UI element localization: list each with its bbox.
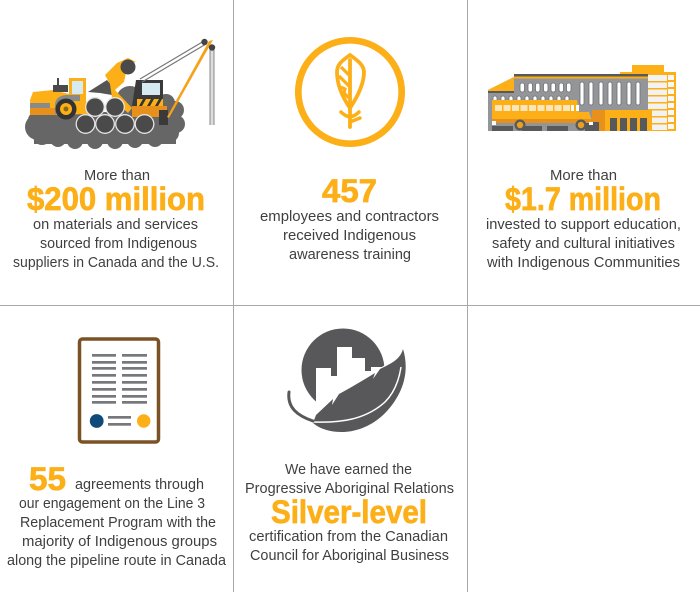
panel: community investment xyxy=(486,65,681,271)
text: agreements description: agreements through xyxy=(75,476,204,493)
icon: construction equipment and pipes xyxy=(25,39,215,149)
text: training description xyxy=(260,208,439,263)
icon: feather in circle xyxy=(298,40,402,144)
text: investment description: invested to support education, xyxy=(486,216,681,233)
panel: agreements xyxy=(7,339,227,569)
text: certification description: Council for Aboriginal Business xyxy=(250,547,449,564)
text: agreements description: our engagement on the Line 3 xyxy=(19,495,205,512)
text: more than: More than xyxy=(84,167,150,184)
text: training description: employees and contractors xyxy=(260,208,439,225)
text: certification description xyxy=(249,528,449,564)
text: suppliers description: on materials and services xyxy=(33,216,198,233)
icon: school building and bus xyxy=(488,65,676,131)
text: more than: More than xyxy=(550,167,617,184)
stat: 55: 55 xyxy=(29,461,66,497)
stat: $200 million: $200 million xyxy=(27,181,205,217)
text: earned xyxy=(245,461,454,497)
icon: feather and city in circle xyxy=(289,328,406,432)
text: training description: awareness training xyxy=(289,246,411,263)
text: agreements description xyxy=(7,476,227,569)
panel: awareness training xyxy=(260,40,439,263)
panel: certification xyxy=(245,328,454,564)
panel: suppliers xyxy=(13,39,219,271)
text: training description: received Indigenous xyxy=(283,227,416,244)
text: investment description: with Indigenous Communities xyxy=(486,254,680,271)
text: agreements description: Replacement Program with the xyxy=(20,514,216,531)
text: suppliers description: suppliers in Canada and the U.S. xyxy=(13,254,219,271)
text: earned: Progressive Aboriginal Relations xyxy=(245,480,454,497)
text: suppliers description: sourced from Indigenous xyxy=(40,235,197,252)
text: agreements description: majority of Indigenous groups xyxy=(22,533,217,550)
icon: agreement document xyxy=(80,339,158,442)
text: agreements description: along the pipeline route in Canada xyxy=(7,552,227,569)
text: earned: We have earned the xyxy=(285,461,412,478)
text: investment description: safety and cultural initiatives xyxy=(492,235,675,252)
stat: $1.7 million: $1.7 million xyxy=(505,181,661,217)
text: suppliers description xyxy=(13,216,219,271)
text: certification description: certification from the Canadian xyxy=(249,528,448,545)
stat: Silver-level: Silver-level xyxy=(271,494,427,530)
stat: 457: 457 xyxy=(322,173,377,209)
text: investment description xyxy=(486,216,681,271)
